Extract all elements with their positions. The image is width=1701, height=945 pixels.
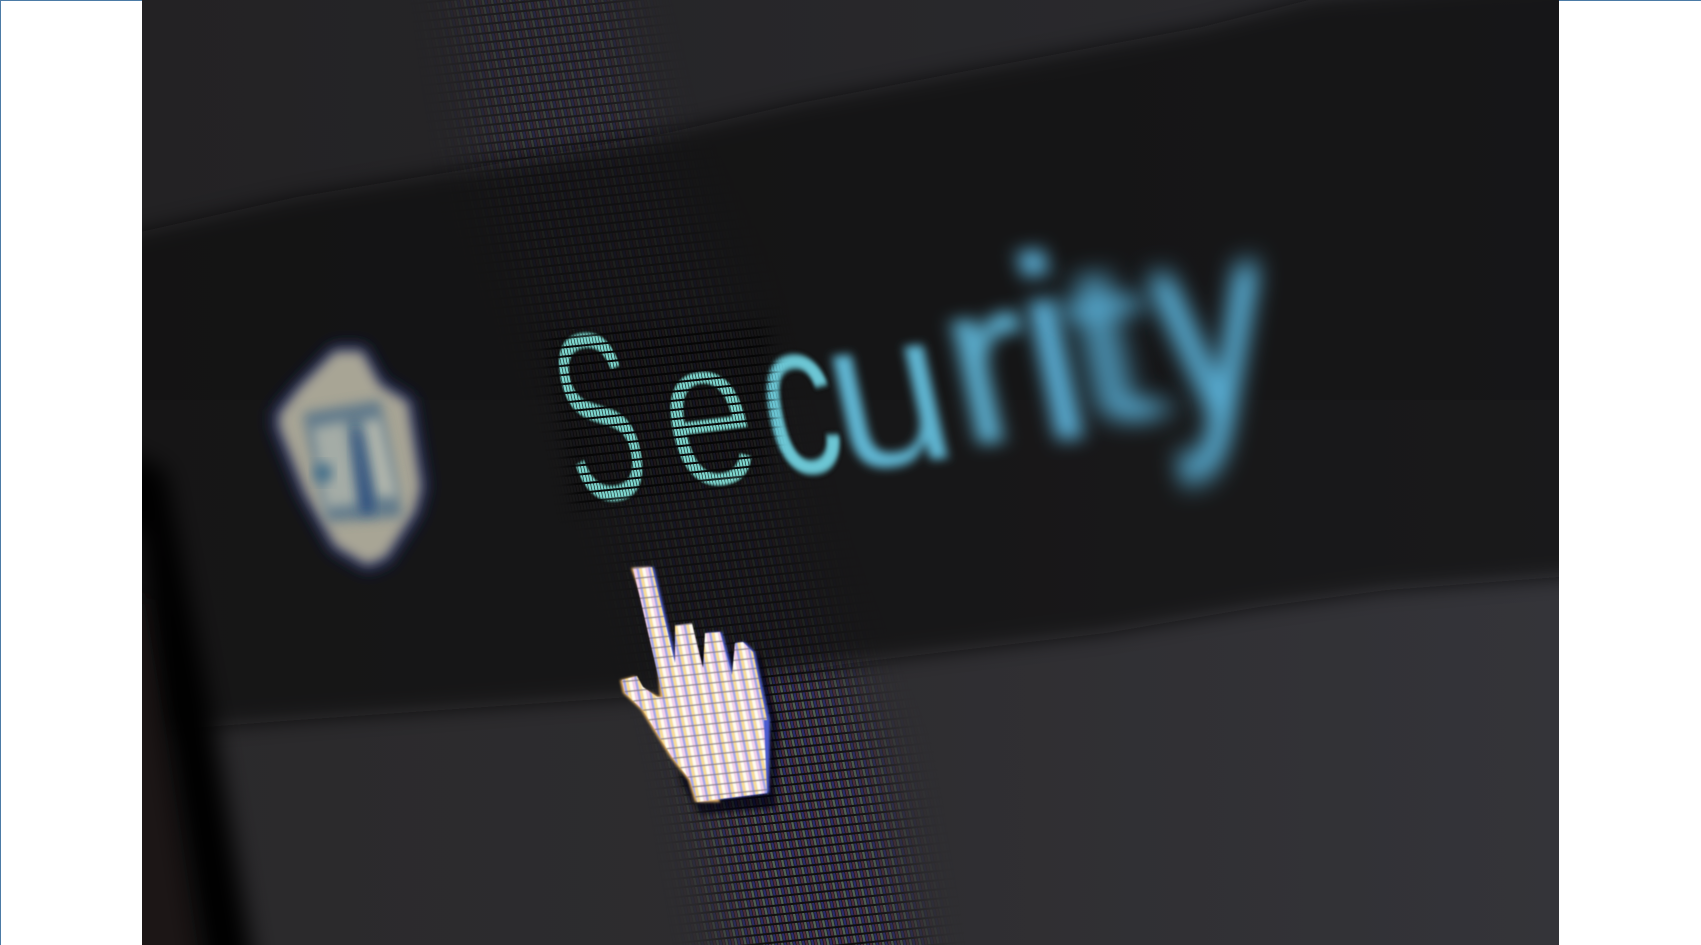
letter i: i [992, 203, 1110, 496]
in-focus pixel grid strip [448, 0, 933, 945]
shield inner light block left [312, 421, 360, 508]
letter y: y [1136, 166, 1283, 482]
word: Security [558, 236, 1275, 503]
shield dark spot [314, 463, 332, 483]
upper grey screen area [142, 0, 1559, 400]
letter r: r [917, 228, 1058, 495]
dark panel left of screen edge [142, 726, 200, 945]
letter t: t [1041, 210, 1177, 473]
shield inner blue panel [303, 400, 403, 522]
hand orange fringe [620, 567, 720, 802]
shield halo [272, 345, 428, 572]
black screen edge at left [142, 456, 260, 945]
lower grey screen area [142, 400, 1559, 945]
letter e: e [637, 289, 777, 535]
hand blue fringe [634, 567, 770, 802]
pixel grid over sharp letters [552, 324, 784, 508]
shield inner light block right [362, 418, 398, 497]
hand body [622, 567, 767, 802]
hand dark shadow [680, 650, 778, 814]
icon: hand pointer cursor [620, 567, 778, 814]
letter u: u [801, 262, 973, 518]
letter c: c [732, 268, 861, 525]
dark menu band across the screen [100, 0, 1620, 735]
shield dark stroke [353, 430, 374, 514]
shield body [279, 351, 421, 565]
letter S: S [531, 278, 667, 556]
icon: shield badge [272, 345, 428, 572]
